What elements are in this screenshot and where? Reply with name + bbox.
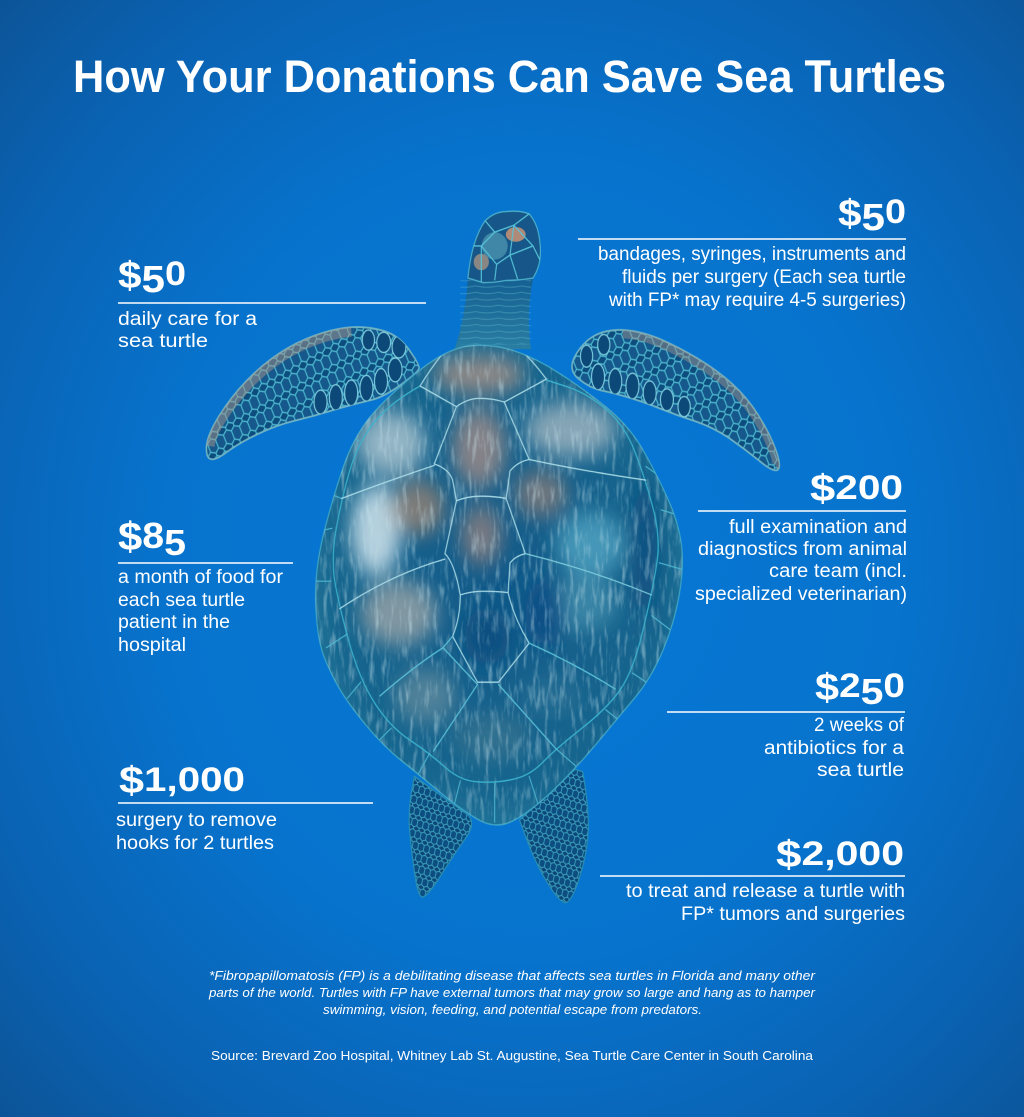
right front flipper [572,330,779,470]
description: care team (incl. [769,561,907,582]
footnote: parts of the world. Turtles with FP have external tumors that may grow so large and hang as to hamper [208,985,816,1000]
head [468,211,540,283]
amount: 2 [839,667,861,705]
amount: $ [118,255,141,297]
description: fluids per surgery (Each sea turtle [622,267,906,288]
callout: $200 examination [695,468,907,605]
amount: 5 [164,522,186,563]
left front flipper [206,327,419,459]
description: antibiotics for a [764,738,904,759]
amount: $ [815,667,839,709]
footnote: *Fibropapillomatosis (FP) is a debilitating disease that affects sea turtles in Florida and many other [209,968,816,983]
callout: $1,000 surgery [116,760,373,854]
description: sea turtle [817,760,904,781]
description [118,309,257,352]
amount: 200 [835,469,903,507]
title: How Your Donations Can Save Sea Turtles [73,51,946,102]
callout: $250 antibiotics [667,667,905,781]
carapace base [316,345,682,825]
footnote: swimming, vision, feeding, and potential escape from predators. [323,1002,702,1017]
description [764,715,905,781]
right rear flipper [520,769,588,903]
description: FP* tumors and surgeries [681,904,905,925]
amount: 1,000 [144,761,245,799]
marginal scutes ring [315,380,683,822]
amount: 0 [883,667,905,705]
amount: $ [810,468,835,510]
amount: 0 [165,255,186,293]
description: patient in the [118,612,230,633]
illustration: sea turtle [206,211,779,903]
description [626,881,905,925]
description [598,244,906,311]
amount: $ [838,193,861,235]
description: to treat and release a turtle with [626,881,905,902]
description: specialized veterinarian) [695,584,907,605]
description [118,567,284,656]
description: hospital [118,635,186,656]
description: each sea turtle [118,590,245,611]
amount: 0 [885,193,906,231]
description [695,517,907,605]
description: surgery to remove [116,810,277,831]
neck wrinkles [460,280,531,345]
description: sea turtle [118,331,208,352]
amount: 2,000 [801,835,904,873]
description: with FP* may require 4-5 surgeries) [608,290,906,311]
description: daily care for a [118,309,257,330]
carapace colour patches [311,338,690,834]
callout: $50 daily care [118,255,426,352]
description: bandages, syringes, instruments and [598,244,906,265]
scute seams [340,344,652,751]
callout: $2,000 treat and release [600,834,905,925]
description: hooks for 2 turtles [116,833,274,854]
callout: $50 bandages [578,193,906,311]
amount: $ [118,515,142,559]
footnote [208,968,816,1017]
description: full examination and [729,517,907,538]
amount: 5 [861,671,883,712]
neck [454,276,534,349]
amount: $ [119,760,144,802]
description: diagnostics from animal [698,539,907,560]
amount: $ [776,834,801,876]
description [116,810,277,854]
source: Source: Brevard Zoo Hospital, Whitney Lab St. Augustine, Sea Turtle Care Center in South Carolina [211,1048,814,1063]
description: 2 weeks of [814,715,905,736]
amount: 5 [861,197,885,239]
callout: $85 food [118,515,293,656]
description: a month of food for [118,567,284,588]
amount: 5 [141,259,165,301]
mottled texture [311,338,690,834]
left rear flipper [409,776,472,897]
amount: 8 [142,515,164,556]
